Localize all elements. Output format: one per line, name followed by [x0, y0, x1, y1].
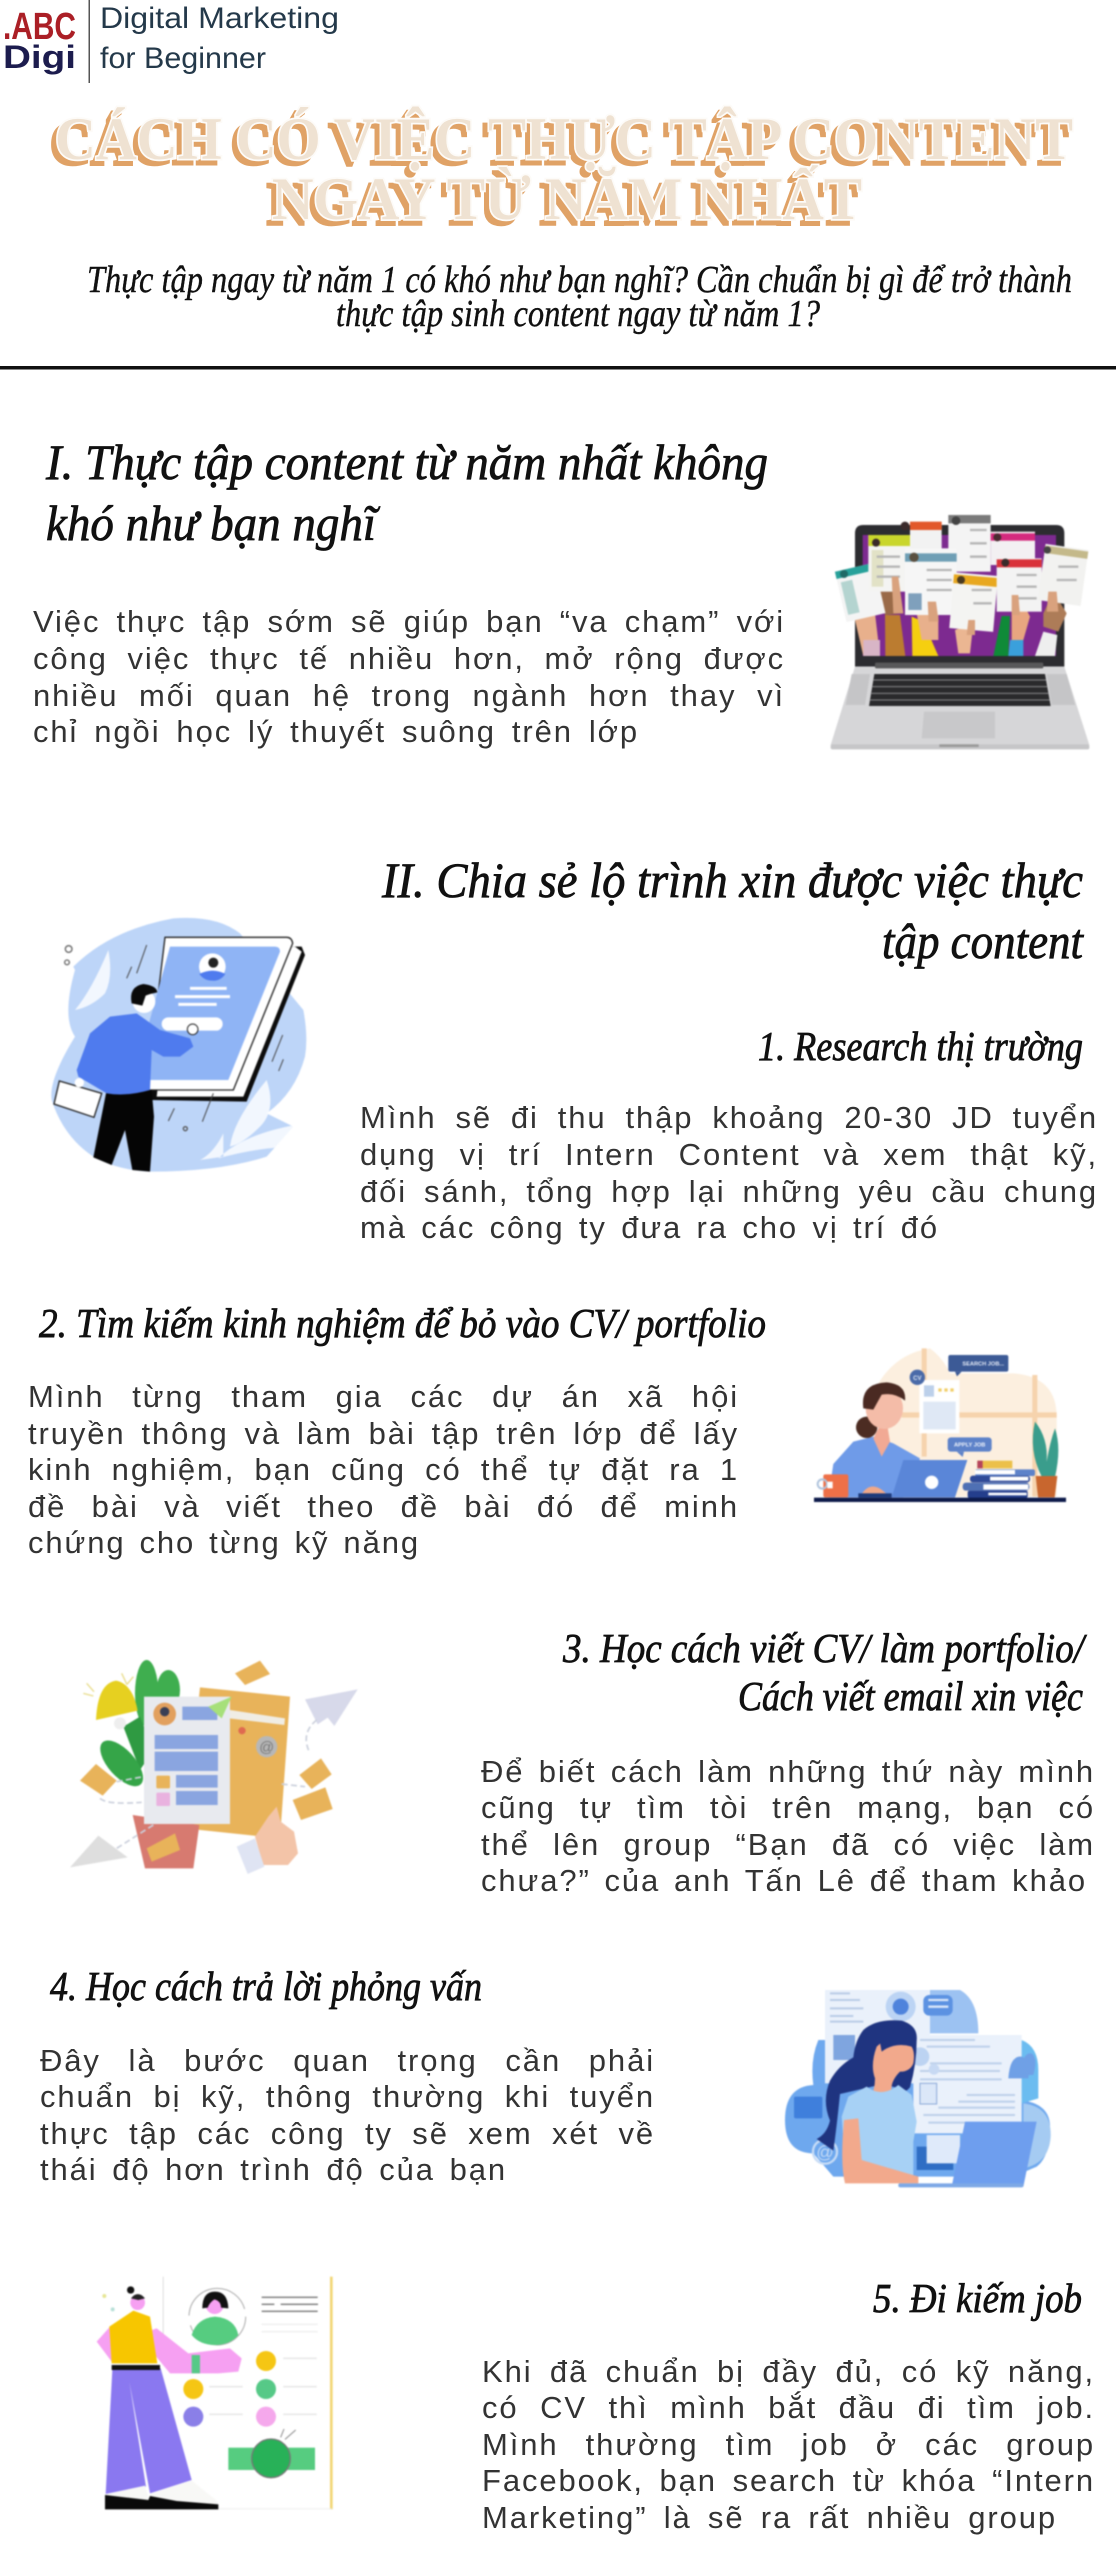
title: CÁCH CÓ VIỆC THỰC TẬP CONTENT: [55, 106, 1073, 172]
logo: [3, 0, 339, 83]
text block: section I: nhiều mối quan hệ trong ngành hơn thay vì: [33, 678, 785, 713]
heading: step 2: 2. Tìm kiếm kinh nghiệm để bỏ vào CV/ portfolio: [39, 1300, 766, 1346]
text block: step 5: Marketing” là sẽ ra rất nhiều group: [482, 2500, 1057, 2535]
text block: step 3: [481, 1754, 1095, 1898]
icon: woman searching for a job: CV: [913, 1376, 922, 1382]
logo: Digi: [3, 39, 76, 75]
text block: step 4: thực tập các công ty sẽ xem xét về: [40, 2116, 655, 2151]
text block: step 5: [482, 2354, 1095, 2535]
icon: woman searching for a job: [813, 1348, 1067, 1503]
heading: section II: II. Chia sẻ lộ trình xin được việc thực: [381, 852, 1083, 908]
text block: step 5: có CV thì mình bắt đầu đi tìm job.: [482, 2390, 1095, 2425]
text block: step 3: Để biết cách làm những thứ này mình: [481, 1754, 1095, 1789]
text block: step 2: đề bài và viết theo đề bài đó để minh: [28, 1489, 739, 1524]
text block: step 1: đối sánh, tổng hợp lại những yêu cầu chung: [360, 1174, 1098, 1209]
text block: section I: [33, 604, 785, 749]
logo: Digital Marketing: [100, 2, 339, 35]
icon: character with checklist board: [96, 2276, 334, 2510]
icon: woman searching for a job: APPLY JOB: [954, 1443, 985, 1449]
heading: step 1: 1. Research thị trường: [758, 1023, 1083, 1069]
icon: laptop with CVs: [830, 514, 1090, 750]
text block: step 2: [28, 1379, 739, 1560]
text block: step 4: thái độ hơn trình độ của bạn: [40, 2152, 507, 2187]
text block: step 3: chưa?” của anh Tấn Lê để tham khảo: [481, 1863, 1087, 1898]
text block: step 2: Mình từng tham gia các dự án xã hội: [28, 1379, 739, 1414]
text block: step 1: mà các công ty đưa ra cho vị trí đó: [360, 1210, 939, 1245]
text block: step 3: thể lên group “Bạn đã có việc làm: [481, 1827, 1095, 1862]
text block: step 4: Đây là bước quan trọng cần phải: [40, 2043, 655, 2078]
heading: section I: I. Thực tập content từ năm nhất không: [45, 434, 768, 490]
text block: step 1: dụng vị trí Intern Content và xem thật kỹ,: [360, 1137, 1098, 1172]
icon: woman at laptop: @: [816, 2142, 834, 2162]
CV cards: [835, 563, 885, 622]
heading: section I: khó như bạn nghĩ: [46, 495, 381, 551]
text block: step 3: cũng tự tìm tòi trên mạng, bạn có: [481, 1790, 1095, 1825]
text block: step 4: chuẩn bị kỹ, thông thường khi tuyển: [40, 2079, 655, 2114]
icon: man tapping tablet: [50, 917, 307, 1173]
heading: section II: [381, 852, 1084, 969]
text block: section I: công việc thực tế nhiều hơn, mở rộng được: [33, 641, 785, 676]
text block: step 1: [360, 1100, 1098, 1245]
text block: step 2: kinh nghiệm, bạn cũng có thể tự đặt ra 1: [28, 1452, 739, 1487]
divider rule: [0, 366, 1116, 370]
text block: section I: Việc thực tập sớm sẽ giúp bạn “va chạm” với: [33, 604, 785, 639]
title: [51, 106, 1073, 232]
text block: section I: chỉ ngồi học lý thuyết suông trên lớp: [33, 714, 639, 749]
text block: step 1: Mình sẽ đi thu thập khoảng 20-30 JD tuyển: [360, 1100, 1098, 1135]
heading: step 4: 4. Học cách trả lời phỏng vấn: [50, 1963, 482, 2009]
text block: step 2: chứng cho từng kỹ năng: [28, 1525, 420, 1560]
heading: step 5: 5. Đi kiếm job: [873, 2275, 1082, 2321]
text block: step 2: truyền thông và làm bài tập trên lớp để lấy: [28, 1416, 739, 1451]
logo: for Beginner: [100, 42, 266, 75]
text block: step 5: Khi đã chuẩn bị đầy đủ, có kỹ năng,: [482, 2354, 1095, 2389]
logo: .ABC: [3, 6, 76, 48]
icon: woman at laptop: [784, 1989, 1052, 2188]
heading: section I: [45, 434, 768, 551]
text block: step 5: Mình thường tìm job ở các group: [482, 2427, 1095, 2462]
icon: CV, folder and envelopes: @: [259, 1740, 274, 1756]
text block: step 4: [40, 2043, 655, 2187]
text block: step 5: Facebook, bạn search từ khóa “Intern: [482, 2463, 1095, 2498]
icon: CV, folder and envelopes: [70, 1659, 358, 1874]
icon: woman searching for a job: SEARCH JOB...: [962, 1362, 1005, 1368]
subtitle: [87, 259, 1072, 335]
subtitle: thực tập sinh content ngay từ năm 1?: [336, 293, 820, 335]
heading: step 3: [562, 1625, 1088, 1719]
heading: section II: tập content: [882, 913, 1084, 969]
title: NGAY TỪ NĂM NHẤT: [272, 166, 862, 232]
arms: [855, 605, 880, 656]
